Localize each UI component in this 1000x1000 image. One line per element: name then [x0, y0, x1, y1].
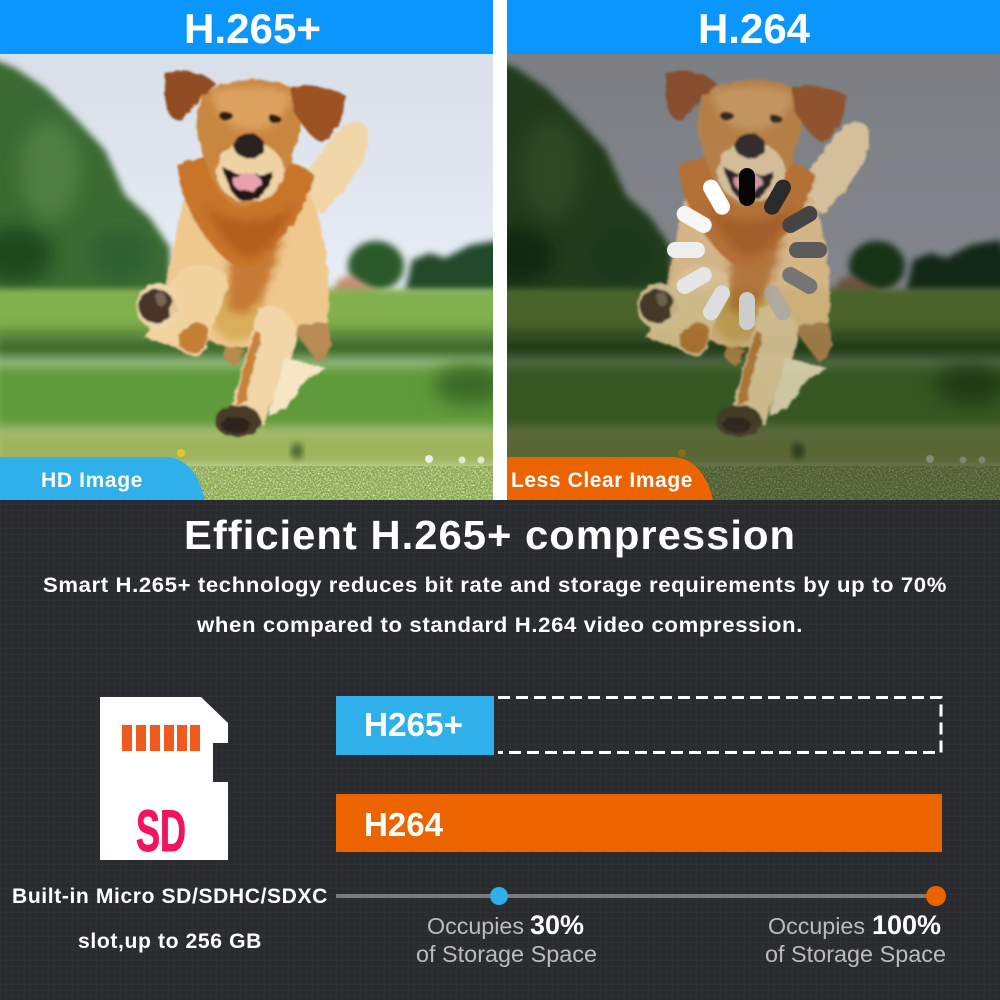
- label: occupies 100%: of Storage Space: [765, 941, 946, 967]
- bar: H264: [336, 794, 942, 852]
- panel: H.264 image: [478, 0, 1000, 502]
- label: occupies 100%: 100%: [872, 910, 941, 940]
- dashed outline: saved space: [498, 698, 941, 752]
- header bar: H.264: H.264: [698, 5, 811, 52]
- label: occupies 30%: Occupies: [427, 913, 524, 939]
- tag: Less Clear Image: Less Clear Image: [511, 469, 693, 492]
- label: occupies 30%: [416, 910, 597, 967]
- tag: HD Image: [0, 457, 205, 500]
- photo: running dog, darkened: [478, 50, 1000, 502]
- heading: Efficient H.265+ compression: [184, 512, 796, 558]
- panel: compression comparison: [0, 500, 1000, 1000]
- panel: H.265+ image: [0, 0, 520, 502]
- photo: running dog, sharp: [0, 50, 520, 502]
- text block: SD slot: slot,up to 256 GB: [78, 930, 262, 953]
- label: occupies 30%: 30%: [530, 910, 584, 940]
- header bar: H.265+: H.265+: [184, 5, 321, 52]
- bar: H264: H264: [364, 806, 444, 843]
- scale line with markers: [336, 886, 946, 906]
- text block: description: Smart H.265+ technology reduces bit rate and storage requirements by up to 70%: [43, 574, 947, 597]
- header bar: H.265+: [0, 0, 493, 54]
- bar: H265+: H265+: [364, 706, 463, 743]
- text block: description: when compared to standard H.264 video compression.: [196, 614, 803, 637]
- icon: loading spinner: [667, 168, 827, 330]
- bar: H265+: [336, 696, 494, 755]
- icon: SD card: SD: [136, 799, 186, 864]
- tag: Less Clear Image: [507, 457, 713, 500]
- header bar: H.264: [507, 0, 1000, 54]
- label: occupies 100%: [765, 910, 946, 967]
- tag: HD Image: HD Image: [41, 469, 143, 492]
- text block: description: [43, 574, 947, 637]
- icon: SD card: [100, 697, 228, 864]
- text block: SD slot: [12, 885, 328, 953]
- label: occupies 100%: Occupies: [768, 913, 865, 939]
- text block: SD slot: Built-in Micro SD/SDHC/SDXC: [12, 885, 328, 908]
- label: occupies 30%: of Storage Space: [416, 941, 597, 967]
